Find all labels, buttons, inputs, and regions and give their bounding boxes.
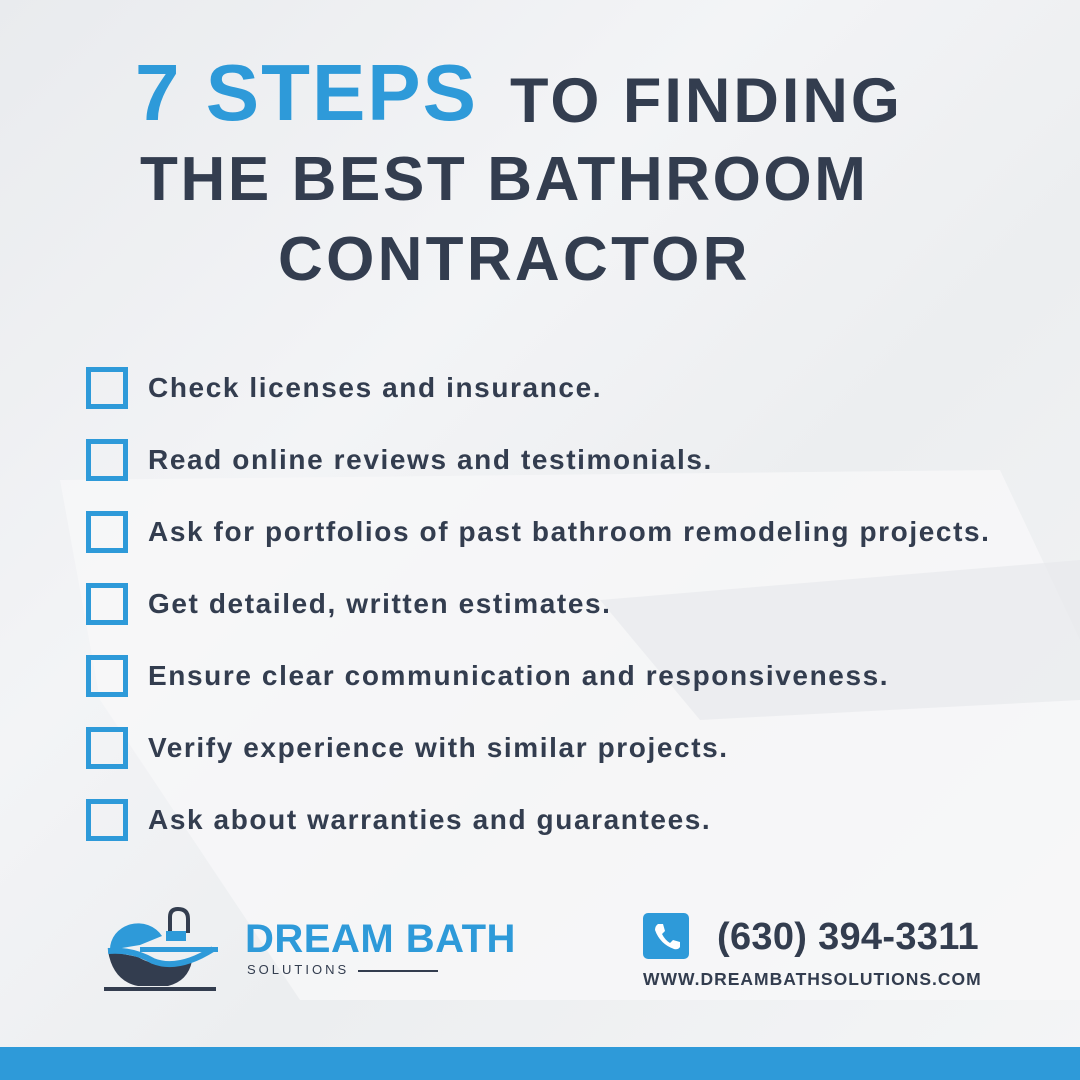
checklist: Ask for portfolios of past bathroom remodeling projects. (148, 516, 991, 547)
logo: SOLUTIONS (247, 962, 349, 977)
checklist (86, 367, 991, 841)
icon: bathtub (104, 907, 218, 991)
title: THE BEST BATHROOM (140, 145, 868, 214)
phone number: (630) 394-3311 (717, 916, 979, 958)
item 2 (86, 439, 713, 481)
item 3 (86, 511, 991, 553)
item 7 (86, 799, 711, 841)
title: TO FINDING (510, 66, 903, 136)
title: CONTRACTOR (278, 225, 751, 294)
item 1 (86, 367, 602, 409)
title: 7 STEPS (135, 48, 478, 137)
item 6 (86, 727, 729, 769)
title (135, 48, 903, 294)
checklist: Check licenses and insurance. (148, 372, 602, 403)
contact (643, 913, 982, 989)
item 4 (86, 583, 612, 625)
brand name: DREAM BATH (245, 917, 516, 961)
checklist: Read online reviews and testimonials. (148, 444, 713, 475)
bottom bar (0, 1047, 1080, 1080)
checklist: Verify experience with similar projects. (148, 732, 729, 763)
logo (104, 907, 516, 991)
checklist: Ask about warranties and guarantees. (148, 804, 711, 835)
website: WWW.DREAMBATHSOLUTIONS.COM (643, 969, 982, 989)
checklist: Get detailed, written estimates. (148, 588, 612, 619)
icon: phone (643, 913, 689, 959)
item 5 (86, 655, 889, 697)
checklist: Ensure clear communication and responsiveness. (148, 660, 889, 691)
